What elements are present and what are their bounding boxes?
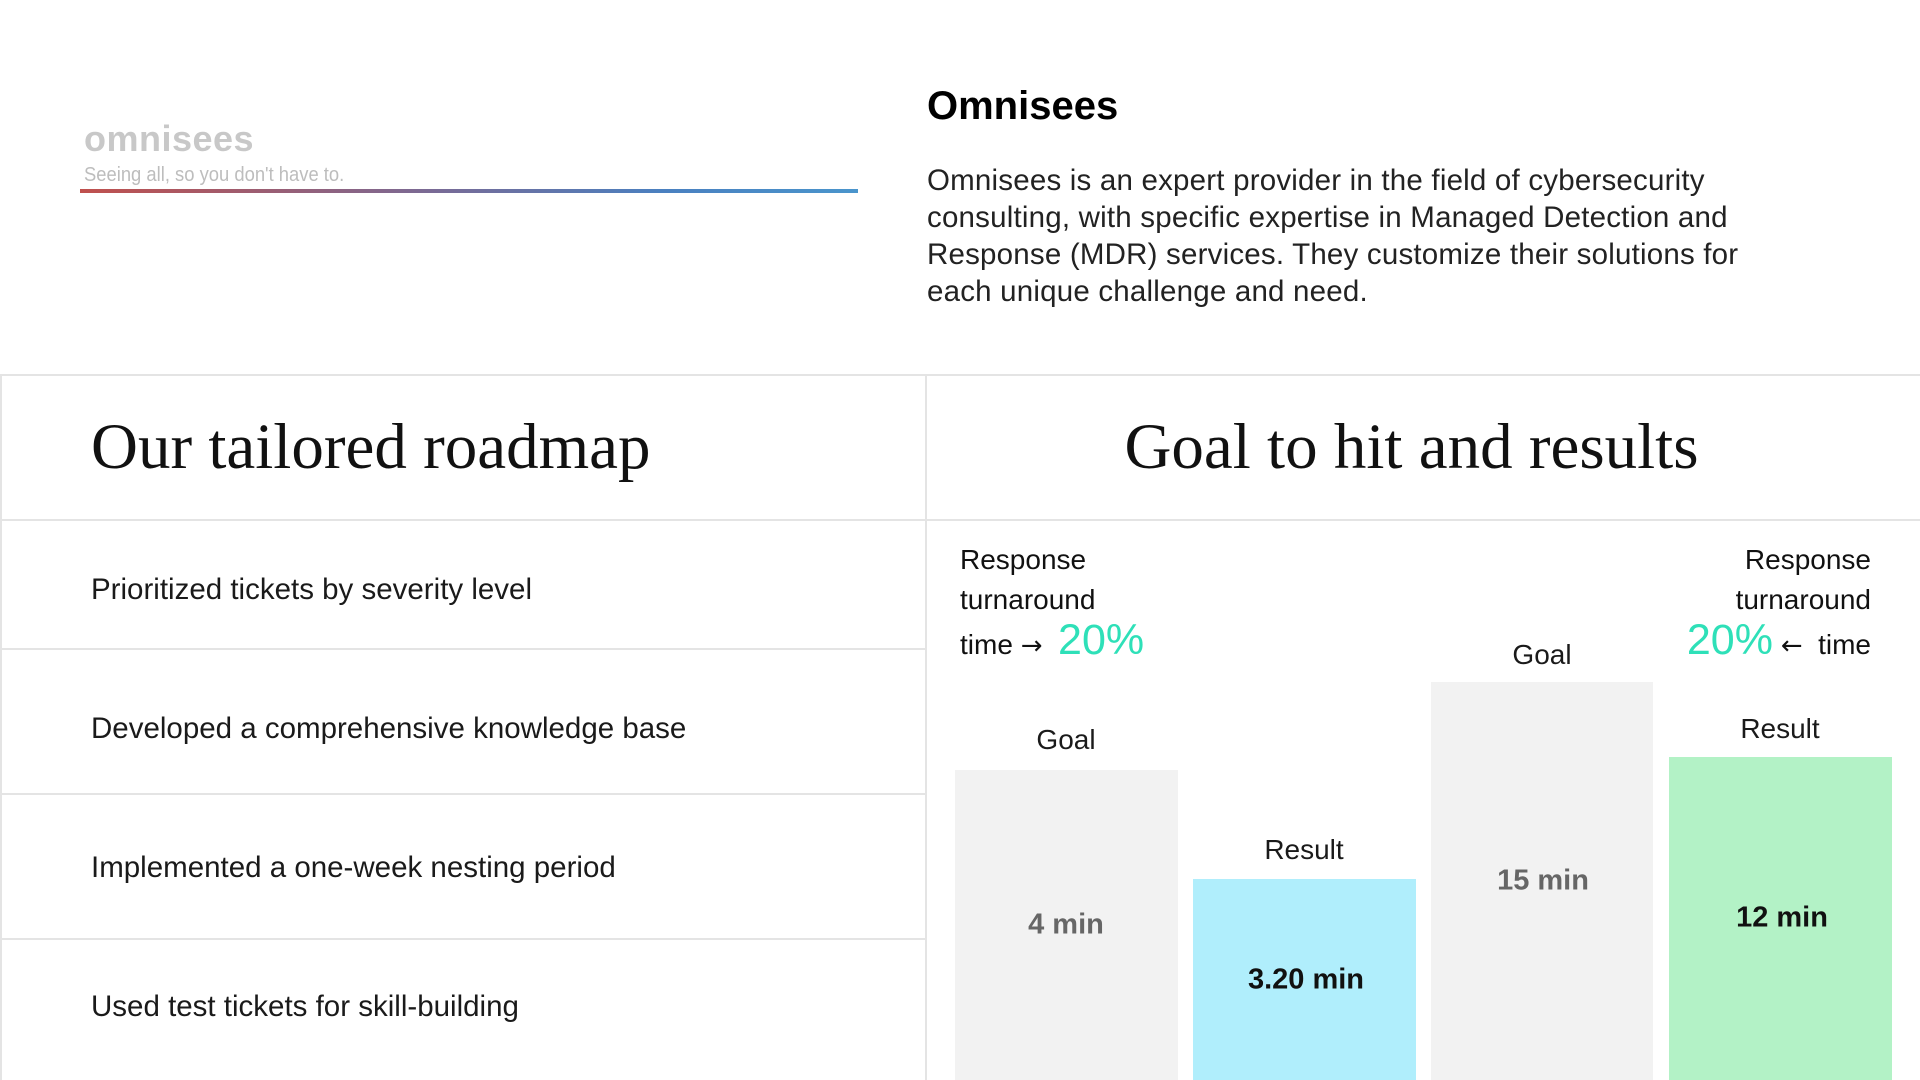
company description: each unique challenge and need.	[927, 275, 1368, 308]
company description: consulting, with specific expertise in Managed Detection and	[927, 201, 1728, 234]
company description: Response (MDR) services. They customize their solutions for	[927, 238, 1738, 271]
bar chart	[955, 682, 1892, 1080]
roadmap item 2: Developed a comprehensive knowledge base	[91, 712, 686, 745]
label: result 1: Result	[1264, 834, 1344, 865]
bar: result 3.20 min	[1193, 879, 1416, 1080]
bar: result 12 min	[1669, 757, 1892, 1080]
callout: left metric: turnaround	[960, 584, 1095, 615]
roadmap item 4: Used test tickets for skill-building	[91, 990, 519, 1023]
bar: goal 4 min	[955, 770, 1178, 1080]
logo	[80, 118, 858, 193]
callout: right metric: 20% ← time	[1687, 616, 1871, 664]
tagline: Seeing all, so you don't have to.	[84, 164, 344, 186]
callout: right metric: Response	[1745, 544, 1871, 575]
callout: right metric	[1687, 544, 1871, 664]
label: goal 2: Goal	[1512, 639, 1572, 670]
callout: left metric	[960, 544, 1144, 664]
bar: goal 15 min	[1431, 682, 1653, 1080]
value: 3.20 min: 3.20 min	[1248, 964, 1364, 996]
company description	[927, 164, 1738, 308]
company heading: Omnisees	[927, 84, 1118, 128]
roadmap item 3: Implemented a one-week nesting period	[91, 851, 616, 884]
heading: roadmap: Our tailored roadmap	[91, 411, 651, 483]
label: goal 1: Goal	[1036, 724, 1096, 755]
value: 4 min: 4 min	[1028, 908, 1104, 940]
value: 12 min: 12 min	[1736, 902, 1828, 934]
heading: goals: Goal to hit and results	[1124, 411, 1699, 483]
roadmap item 1: Prioritized tickets by severity level	[91, 573, 532, 606]
value: 15 min: 15 min	[1497, 864, 1589, 896]
callout: right metric: turnaround	[1736, 584, 1871, 615]
gradient underline	[80, 189, 858, 193]
label: result 2: Result	[1740, 713, 1820, 744]
callout: left metric: Response	[960, 544, 1086, 575]
company description: Omnisees is an expert provider in the field of cybersecurity	[927, 164, 1705, 197]
callout: left metric: time → 20%	[960, 616, 1144, 664]
logo wordmark: omnisees	[84, 118, 254, 159]
